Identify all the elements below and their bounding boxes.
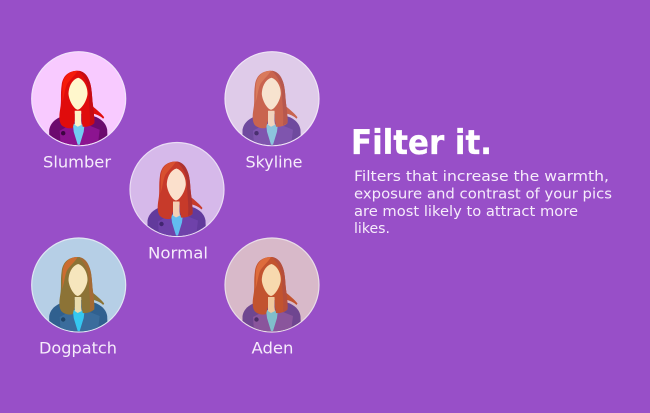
label: Dogpatch: Dogpatch xyxy=(39,338,117,358)
label: Aden: Aden xyxy=(252,338,294,358)
label: Slumber: Slumber xyxy=(43,152,111,172)
avatar: Normal xyxy=(130,142,224,262)
label: Skyline: Skyline xyxy=(246,152,302,172)
body text xyxy=(354,169,612,237)
label: Normal: Normal xyxy=(148,244,208,262)
avatar: Dogpatch xyxy=(32,238,126,358)
avatar: Aden xyxy=(225,238,319,358)
body text: Filters that increase the warmth, xyxy=(354,169,609,185)
body text: exposure and contrast of your pics xyxy=(354,186,612,202)
avatar: Skyline xyxy=(225,52,319,172)
body text: are most likely to attract more xyxy=(354,204,578,220)
avatar: Slumber xyxy=(32,52,126,172)
body text: likes. xyxy=(354,221,390,237)
heading: Filter it. xyxy=(351,123,492,163)
